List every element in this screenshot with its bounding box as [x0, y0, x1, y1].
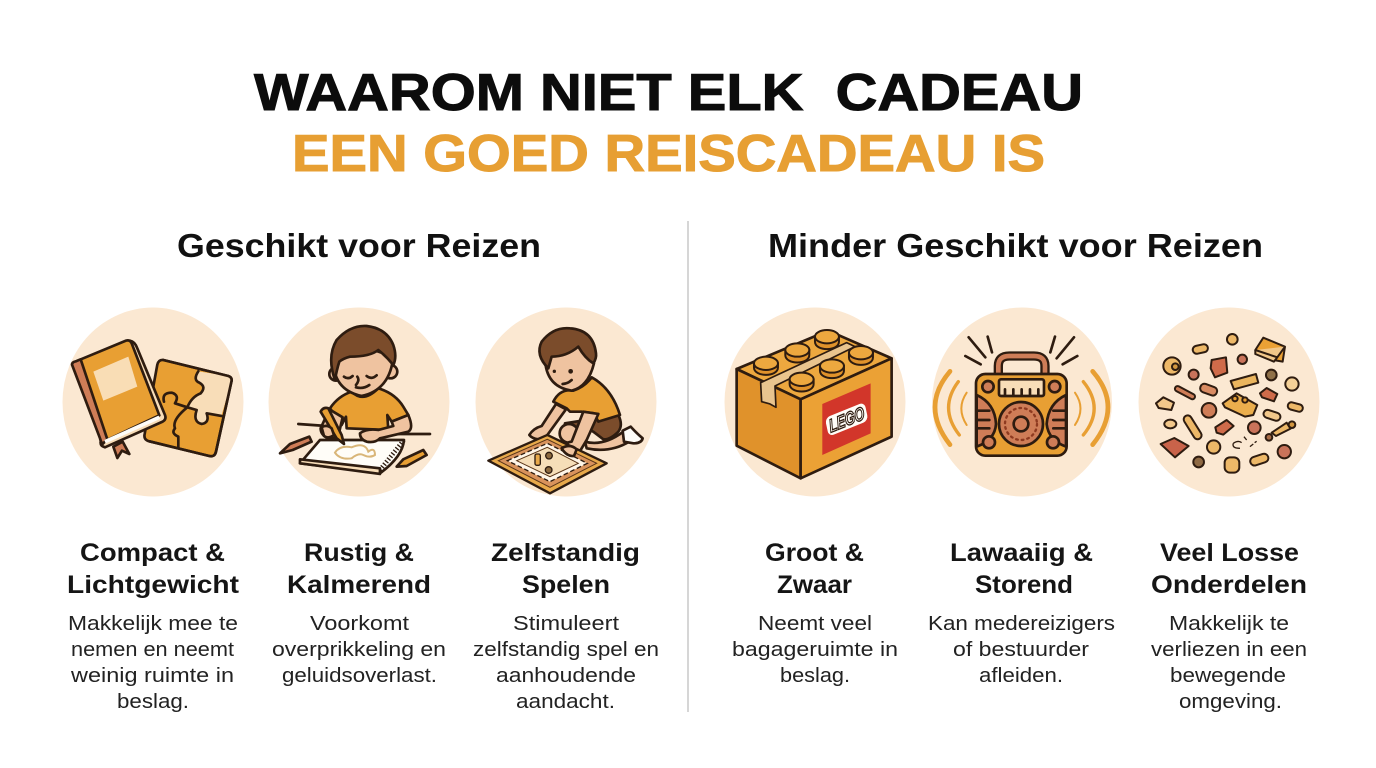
text: compact description: nemen en neemt: [71, 639, 234, 661]
label: veel losse: Veel Losse: [1160, 539, 1299, 567]
icon: scattered small parts: [1138, 308, 1320, 496]
label: groot: Groot &: [765, 539, 864, 567]
title: WAAROM NIET ELK CADEAU: [254, 64, 1083, 122]
text: lego logo: LEGO: [827, 403, 866, 437]
text: compact description: weinig ruimte in: [70, 665, 234, 687]
label: rustig: Rustig &: [304, 539, 414, 567]
label: lawaaiig: Lawaaiig &: [950, 539, 1093, 567]
icon: loud radio: [932, 308, 1112, 496]
text: groot description: beslag.: [780, 665, 850, 687]
title: EEN GOED REISCADEAU IS: [292, 125, 1045, 183]
icon: boy with board game: [476, 308, 656, 496]
label: groot: [765, 539, 864, 599]
text: veel losse description: [1151, 613, 1307, 713]
text: lawaaiig description: Kan medereizigers: [928, 613, 1115, 635]
card: rustig en kalmerend: [268, 308, 450, 687]
text: zelfstandig description: aandacht.: [516, 691, 615, 713]
text: veel losse description: verliezen in een: [1151, 639, 1307, 661]
text: zelfstandig description: Stimuleert: [513, 613, 620, 635]
text: groot description: [732, 613, 898, 687]
card: zelfstandig spelen: [473, 308, 659, 713]
text: compact description: [68, 613, 238, 713]
label: zelfstandig: Spelen: [522, 571, 610, 599]
text: zelfstandig description: zelfstandig spel en: [473, 639, 659, 661]
text: compact description: beslag.: [117, 691, 189, 713]
panel: geschikt voor reizen: [62, 227, 659, 713]
text: zelfstandig description: aanhoudende: [496, 665, 636, 687]
text: veel losse description: Makkelijk te: [1169, 613, 1289, 635]
heading: minder geschikt: Minder Geschikt voor Reizen: [768, 227, 1263, 264]
label: zelfstandig: [491, 539, 640, 599]
text: rustig description: Voorkomt: [310, 613, 410, 635]
text: groot description: bagageruimte in: [732, 639, 898, 661]
label: compact: Lichtgewicht: [67, 571, 240, 599]
label: rustig: Kalmerend: [287, 571, 431, 599]
card: compact en lichtgewicht: [62, 308, 244, 713]
text: veel losse description: bewegende: [1170, 665, 1286, 687]
label: veel losse: [1151, 539, 1307, 599]
heading: geschikt: Geschikt voor Reizen: [177, 227, 541, 264]
text: rustig description: overprikkeling en: [272, 639, 446, 661]
label: lawaaiig: [950, 539, 1093, 599]
icon: boy drawing: [268, 308, 450, 496]
label: compact: [67, 539, 240, 599]
text: lawaaiig description: of bestuurder: [953, 639, 1089, 661]
text: lawaaiig description: afleiden.: [979, 665, 1063, 687]
text: rustig description: geluidsoverlast.: [282, 665, 437, 687]
icon: book and puzzle: [62, 308, 244, 496]
label: veel losse: Onderdelen: [1151, 571, 1307, 599]
text: compact description: Makkelijk mee te: [68, 613, 238, 635]
text: veel losse description: omgeving.: [1179, 691, 1282, 713]
label: groot: Zwaar: [777, 571, 852, 599]
label: zelfstandig: Zelfstandig: [491, 539, 640, 567]
card: veel losse onderdelen: [1138, 308, 1320, 713]
title: [254, 64, 1083, 183]
text: zelfstandig description: [473, 613, 659, 713]
label: compact: Compact &: [80, 539, 225, 567]
text: groot description: Neemt veel: [758, 613, 872, 635]
card: groot en zwaar: [724, 308, 906, 687]
card: lawaaiig en storend: [928, 308, 1115, 687]
panel: minder geschikt voor reizen: [724, 227, 1320, 713]
label: lawaaiig: Storend: [975, 571, 1073, 599]
text: rustig description: [272, 613, 446, 687]
label: rustig: [287, 539, 431, 599]
text: lawaaiig description: [928, 613, 1115, 687]
icon: lego box: [724, 308, 906, 496]
